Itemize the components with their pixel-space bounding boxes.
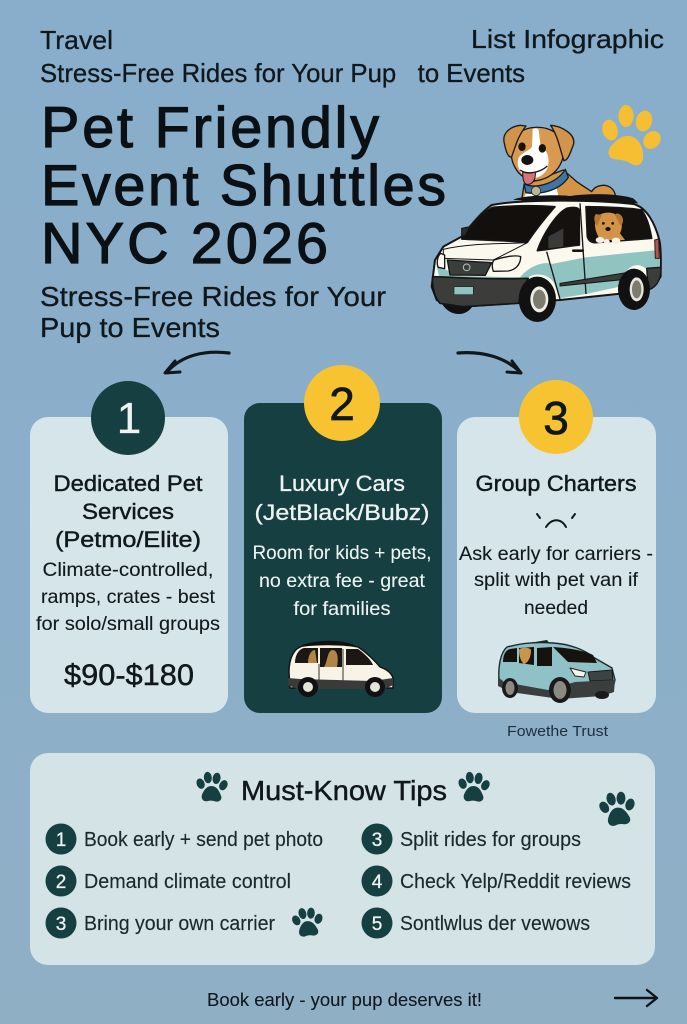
number badge 3	[519, 380, 593, 454]
tip 6: garbled line: Sontlwlus der vewows	[400, 912, 590, 935]
card description: needed	[524, 597, 588, 619]
card description: ramps, crates - best	[41, 586, 216, 608]
subtitle: Stress-Free Rides for Your	[40, 281, 386, 312]
panel: group charters	[457, 380, 656, 713]
footer message: Book early - your pup deserves it!	[207, 989, 482, 1010]
tip 6: garbled line: 5	[372, 914, 382, 935]
panel: luxury cars	[244, 365, 442, 713]
tip 3	[46, 908, 275, 938]
tip 4: split rides: Split rides for groups	[400, 828, 581, 851]
card description: for solo/small groups	[36, 613, 220, 635]
arrow: curved left	[165, 352, 229, 373]
card description: Climate-controlled,	[42, 559, 214, 581]
tip 2: 2	[56, 872, 66, 893]
card heading: Dedicated Pet	[54, 471, 203, 496]
number badge 2: 2	[329, 378, 355, 430]
tip 5: check reviews	[362, 866, 631, 896]
number badge 3: 3	[543, 392, 569, 444]
title: Pet Friendly	[41, 96, 379, 160]
card heading: Group Charters	[476, 471, 636, 496]
tip 4: split rides: 3	[372, 830, 382, 851]
card description	[36, 559, 220, 635]
icon: teal van	[498, 640, 615, 703]
card background	[244, 403, 442, 713]
number badge 2	[304, 365, 380, 441]
panel: must-know tips	[30, 753, 655, 965]
tip 2	[46, 866, 291, 896]
card description	[252, 542, 432, 620]
icon: paw top right	[596, 788, 640, 828]
panel: dedicated pet services	[30, 381, 228, 713]
tips background	[30, 753, 655, 965]
price: $90-$180	[64, 659, 194, 692]
icon: yellow paw	[600, 105, 664, 165]
van front and bumper	[432, 253, 661, 314]
title: Event Shuttles	[41, 154, 446, 218]
tip 3: Bring your own carrier	[84, 912, 275, 935]
caption: trust note: Fowethe Trust	[507, 724, 608, 740]
van shell	[432, 194, 661, 307]
icon: paw heading left	[195, 772, 229, 802]
card heading: (Petmo/Elite)	[55, 527, 201, 552]
icon: frown mark	[537, 514, 575, 527]
number badge 1: 1	[117, 394, 141, 443]
card description: no extra fee - great	[259, 570, 426, 592]
number badge 1	[91, 381, 165, 455]
van wheels	[519, 269, 650, 322]
illustration: dog on van	[432, 125, 661, 322]
card description	[459, 543, 653, 619]
card description: for families	[294, 598, 391, 620]
tip 3: 3	[56, 914, 66, 935]
card background	[30, 417, 228, 713]
card heading: Luxury Cars	[279, 471, 405, 496]
top label: List Infographic: List Infographic	[471, 24, 664, 54]
tip 6: garbled line	[362, 908, 590, 938]
tip 5: check reviews: 4	[372, 872, 383, 893]
title	[41, 96, 446, 276]
arrow: curved right	[458, 353, 521, 373]
tip 1	[46, 824, 323, 854]
tips heading: Must-Know Tips	[241, 775, 447, 806]
arrow: footer right	[615, 990, 657, 1006]
card background	[457, 417, 656, 713]
icon: paw heading right	[457, 772, 491, 802]
tip 4: split rides	[362, 824, 581, 854]
card heading	[54, 471, 203, 552]
icon: white van	[288, 641, 393, 697]
tip 2: Demand climate control	[84, 870, 291, 893]
card description: Room for kids + pets,	[252, 542, 432, 564]
dog body	[504, 125, 615, 200]
title: NYC 2026	[41, 212, 328, 276]
card heading	[254, 471, 430, 525]
card description: split with pet van if	[474, 569, 639, 591]
tip 5: check reviews: Check Yelp/Reddit reviews	[400, 870, 631, 893]
tagline: Stress-Free Rides for Your Pup to Events	[40, 58, 525, 88]
tip 1: Book early + send pet photo	[84, 828, 323, 851]
card description: Ask early for carriers -	[459, 543, 653, 565]
tip 1: 1	[56, 830, 66, 851]
dog in window	[594, 213, 625, 244]
subtitle	[40, 281, 386, 343]
top label: Travel: Travel	[40, 25, 113, 55]
card heading: Services	[82, 499, 174, 524]
icon: paw by carrier tip	[289, 905, 326, 938]
subtitle: Pup to Events	[40, 312, 220, 343]
card heading: (JetBlack/Bubz)	[254, 500, 430, 525]
